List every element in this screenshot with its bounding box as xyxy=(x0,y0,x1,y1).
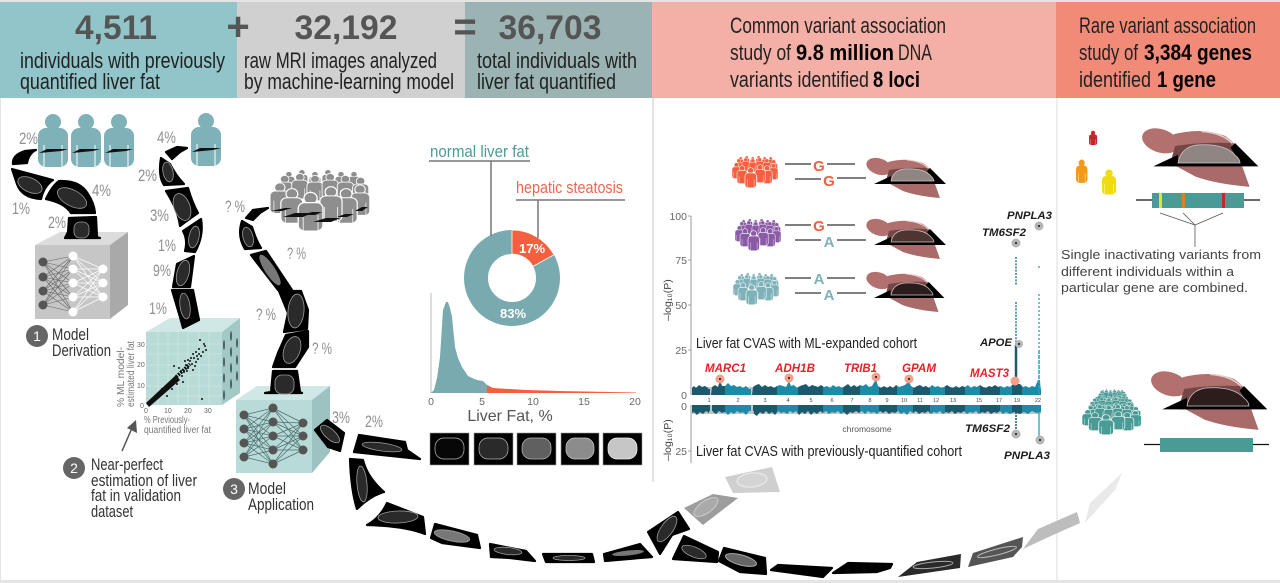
step 1 label: 1 xyxy=(33,328,41,344)
y axis: 25 xyxy=(675,345,687,357)
label: hepatic steatosis xyxy=(516,178,625,238)
locus labels xyxy=(965,423,1050,462)
density chart: liver fat distribution: 10 xyxy=(527,396,539,408)
chromosome numbers: 3 xyxy=(763,398,767,404)
header: rare variant association study: 3,384 genes xyxy=(1144,40,1252,65)
scatter tick labels: 0 xyxy=(140,403,144,410)
step 2 label: dataset xyxy=(91,502,133,521)
header: previously quantified individuals: 4,511 xyxy=(75,9,157,47)
signal silhouette xyxy=(692,380,1041,395)
MRI slice chain: validation xyxy=(160,147,202,328)
locus markers xyxy=(716,222,1044,386)
percent labels: derivation: 1% xyxy=(12,199,30,218)
MRI thumbnails: increasing liver fat xyxy=(430,433,642,465)
genotype row: G/A: A xyxy=(824,234,835,251)
locus labels: TM6SF2 xyxy=(965,423,1010,435)
scatter tick labels: 10 xyxy=(164,408,172,415)
step 3 label: Application xyxy=(248,495,314,514)
panel divider: rare variant section xyxy=(1056,98,1058,583)
rare variant carriers: individuals xyxy=(1076,131,1116,194)
chromosome numbers: 8 xyxy=(868,398,872,404)
chromosome numbers: 10 xyxy=(901,398,907,404)
people group: derivation cohort xyxy=(38,114,134,167)
MRI slice chain: output stream xyxy=(315,420,1122,577)
chromosome numbers: 4 xyxy=(786,398,790,404)
y axis: –log₁₀(P) xyxy=(662,279,674,321)
TM6SF2 and PNPLA3 spikes xyxy=(1016,257,1039,395)
caption: single inactivating variants: Single inactivating variants from xyxy=(1061,247,1261,262)
y axis: –log₁₀(P) xyxy=(662,419,674,461)
chromosome numbers: 5 xyxy=(809,398,813,404)
scatter tick labels: 0 xyxy=(144,408,148,415)
genotype row: A/A xyxy=(733,269,944,312)
header: raw MRI images: by machine-learning model xyxy=(244,69,454,94)
locus labels: TRIB1 xyxy=(844,363,877,375)
chromosome numbers: 12 xyxy=(933,398,939,404)
y axis xyxy=(662,211,691,402)
percent labels: validation: 1% xyxy=(149,299,167,318)
donut chart: liver fat prevalence xyxy=(476,230,554,321)
chromosome numbers xyxy=(707,398,1041,404)
chromosome numbers: 6 xyxy=(830,398,834,404)
genotype row: G/G: G xyxy=(823,173,835,190)
percent labels: derivation xyxy=(12,129,111,232)
chromosome numbers: 15 xyxy=(976,398,982,404)
y axis xyxy=(662,401,691,463)
plot title: Liver fat CVAS with previously-quantified cohort xyxy=(696,443,963,460)
locus labels: MAST3 xyxy=(970,368,1010,380)
percent labels: derivation: 2% xyxy=(19,129,38,148)
chromosome numbers: 2 xyxy=(736,398,740,404)
percent labels: application: ? % xyxy=(256,305,276,324)
genotype row: G/G: G xyxy=(813,158,825,175)
density chart: liver fat distribution xyxy=(428,293,641,425)
scatter tick labels: 30 xyxy=(137,342,145,349)
step 1 label: Model xyxy=(52,325,89,344)
caption: single inactivating variants xyxy=(1061,247,1261,295)
percent labels: derivation: 2% xyxy=(48,213,66,232)
header: raw MRI images: 32,192 xyxy=(294,9,398,47)
percent labels: derivation: 4% xyxy=(92,181,111,200)
genotype row: A/A: A xyxy=(814,271,825,288)
scatter y axis label: estimated liver fat xyxy=(126,341,137,407)
scatter y axis label: % ML model- xyxy=(116,347,127,407)
step 3 label: Model xyxy=(248,479,286,498)
locus labels: TM6SF2 xyxy=(982,227,1026,239)
percent labels: application: ? % xyxy=(225,197,245,216)
locus labels: PNPLA3 xyxy=(1007,210,1052,222)
scatter tick labels: 20 xyxy=(184,408,192,415)
locus labels: GPAM xyxy=(902,363,936,375)
header: rare variant association study: study of xyxy=(1079,40,1139,65)
header: total individuals xyxy=(465,2,652,98)
scatter x axis label xyxy=(144,415,211,436)
chromosome numbers: 1 xyxy=(707,398,711,404)
y axis: 0 xyxy=(681,401,687,413)
scatter tick labels: 30 xyxy=(204,408,212,415)
genotype row: G/A: G xyxy=(813,218,825,235)
caption: single inactivating variants: particular gene are combined. xyxy=(1061,280,1248,295)
y axis: 25 xyxy=(675,446,687,458)
MRI slice chain: application xyxy=(240,208,308,394)
density chart: liver fat distribution: 5 xyxy=(479,396,485,408)
step 2 label: Near-perfect xyxy=(91,455,163,474)
MRI slice chain: derivation xyxy=(12,150,100,238)
significant loci xyxy=(1012,412,1044,444)
y axis: 100 xyxy=(669,211,687,223)
header: previously quantified individuals: individuals with previously xyxy=(20,48,225,73)
percent labels: application: 3% xyxy=(332,408,350,427)
header: common variant association study: Common variant association xyxy=(730,13,946,38)
step 3 label xyxy=(223,478,314,514)
gene bar with single variants xyxy=(1136,193,1260,247)
panel divider: common variant section xyxy=(652,98,654,482)
y axis: 75 xyxy=(675,255,687,267)
density chart: liver fat distribution: 0 xyxy=(428,396,434,408)
density chart: liver fat distribution: 15 xyxy=(578,396,590,408)
percent labels: application xyxy=(225,197,383,431)
header: previously quantified individuals: quantified liver fat xyxy=(20,69,160,94)
chromosome numbers: 7 xyxy=(850,398,854,404)
step 1 label xyxy=(26,325,111,360)
header: rare variant association study: identified xyxy=(1079,67,1151,92)
locus labels: PNPLA3 xyxy=(1004,450,1050,462)
percent labels: application: ? % xyxy=(312,339,332,358)
model box 3: neural network application xyxy=(236,386,330,473)
chromosome numbers: 17 xyxy=(996,398,1002,404)
scatter tick labels xyxy=(137,342,212,415)
scatter x axis label: % Previously- xyxy=(144,415,190,426)
locus labels xyxy=(705,210,1052,380)
chromosome numbers: 19 xyxy=(1014,398,1020,404)
crowd: aggregated carriers xyxy=(1082,389,1141,435)
percent labels: validation: 1% xyxy=(158,236,176,255)
header: total individuals: liver fat quantified xyxy=(477,69,616,94)
Manhattan plot: ML-expanded cohort xyxy=(662,210,1052,440)
header: total individuals: 36,703 xyxy=(498,9,602,47)
x axis label: chromosome xyxy=(842,424,892,434)
header: raw MRI images: raw MRI images analyzed xyxy=(244,48,437,73)
step 2 label: fat in validation xyxy=(91,486,181,505)
y axis: 50 xyxy=(675,300,687,312)
step 1 label: Derivation xyxy=(52,341,111,360)
liver: rare variant carrier xyxy=(1139,124,1258,187)
header: previously quantified individuals xyxy=(0,2,237,98)
caption: single inactivating variants: different individuals within a xyxy=(1061,264,1235,279)
signal silhouette xyxy=(692,405,1041,416)
density chart: liver fat distribution: 20 xyxy=(629,396,641,408)
person: validation individual xyxy=(191,113,221,166)
header: common variant association study: 9.8 million xyxy=(796,40,894,65)
scatter points xyxy=(146,339,207,407)
genotype row: G/G xyxy=(732,155,946,198)
percent labels: validation: 9% xyxy=(153,261,171,280)
y axis: 0 xyxy=(681,390,687,402)
percent labels: application: 2% xyxy=(365,412,383,431)
chromosome numbers: 11 xyxy=(917,398,923,404)
locus labels: APOE xyxy=(979,337,1013,349)
header: rare variant association study xyxy=(1056,2,1280,98)
percent labels: validation xyxy=(138,128,176,318)
scatter y axis label xyxy=(116,341,137,407)
gene bar: combined xyxy=(1144,438,1269,452)
header: raw MRI images xyxy=(237,2,465,98)
genotype row: A/A: A xyxy=(824,287,835,304)
header: common variant association study: variants identified xyxy=(730,67,869,92)
donut chart: liver fat prevalence: 17% xyxy=(519,241,545,256)
header: common variant association study: 8 loci xyxy=(873,67,920,92)
locus labels: MARC1 xyxy=(705,363,746,375)
Manhattan plot: previously quantified cohort xyxy=(664,403,1050,463)
equals sign: = xyxy=(453,5,477,49)
step 2 label xyxy=(63,455,197,521)
step 2 label: estimation of liver xyxy=(91,471,197,490)
model box 2: validation scatter plot xyxy=(116,318,240,436)
scatter tick labels: 20 xyxy=(137,362,145,369)
scatter x axis label: quantified liver fat xyxy=(144,425,211,436)
plot title: Liver fat CVAS with ML-expanded cohort xyxy=(696,335,918,352)
chromosome numbers: 13 xyxy=(950,398,956,404)
header: common variant association study: DNA xyxy=(898,40,932,65)
header: total individuals: total individuals with xyxy=(477,48,637,73)
genotype row: G/A xyxy=(735,216,946,259)
donut chart: liver fat prevalence: 83% xyxy=(500,306,526,321)
header: common variant association study: study of xyxy=(730,40,792,65)
label: hepatic steatosis: hepatic steatosis xyxy=(516,178,623,197)
header: common variant association study xyxy=(652,2,1056,98)
density chart: liver fat distribution: Liver Fat, % xyxy=(467,408,553,425)
step 2 label: 2 xyxy=(70,460,78,476)
percent labels: application: ? % xyxy=(287,244,306,263)
chromosome numbers: 9 xyxy=(885,398,889,404)
percent labels: validation: 4% xyxy=(157,128,176,147)
percent labels: validation: 2% xyxy=(138,166,157,185)
model box 1: neural network derivation xyxy=(35,232,128,319)
percent labels: validation: 3% xyxy=(150,206,169,225)
label: normal liver fat xyxy=(429,142,530,236)
arrow to scatter plot xyxy=(122,420,137,451)
locus labels: ADH1B xyxy=(774,363,815,375)
liver: aggregated result xyxy=(1148,367,1267,430)
header: rare variant association study: 1 gene xyxy=(1157,67,1216,92)
people crowd: unlabeled images xyxy=(270,170,370,231)
plus sign: + xyxy=(226,5,250,49)
chromosome numbers: 22 xyxy=(1035,398,1041,404)
scatter tick labels: 10 xyxy=(137,383,145,390)
label: normal liver fat: normal liver fat xyxy=(430,142,529,161)
step 3 label: 3 xyxy=(230,481,238,497)
